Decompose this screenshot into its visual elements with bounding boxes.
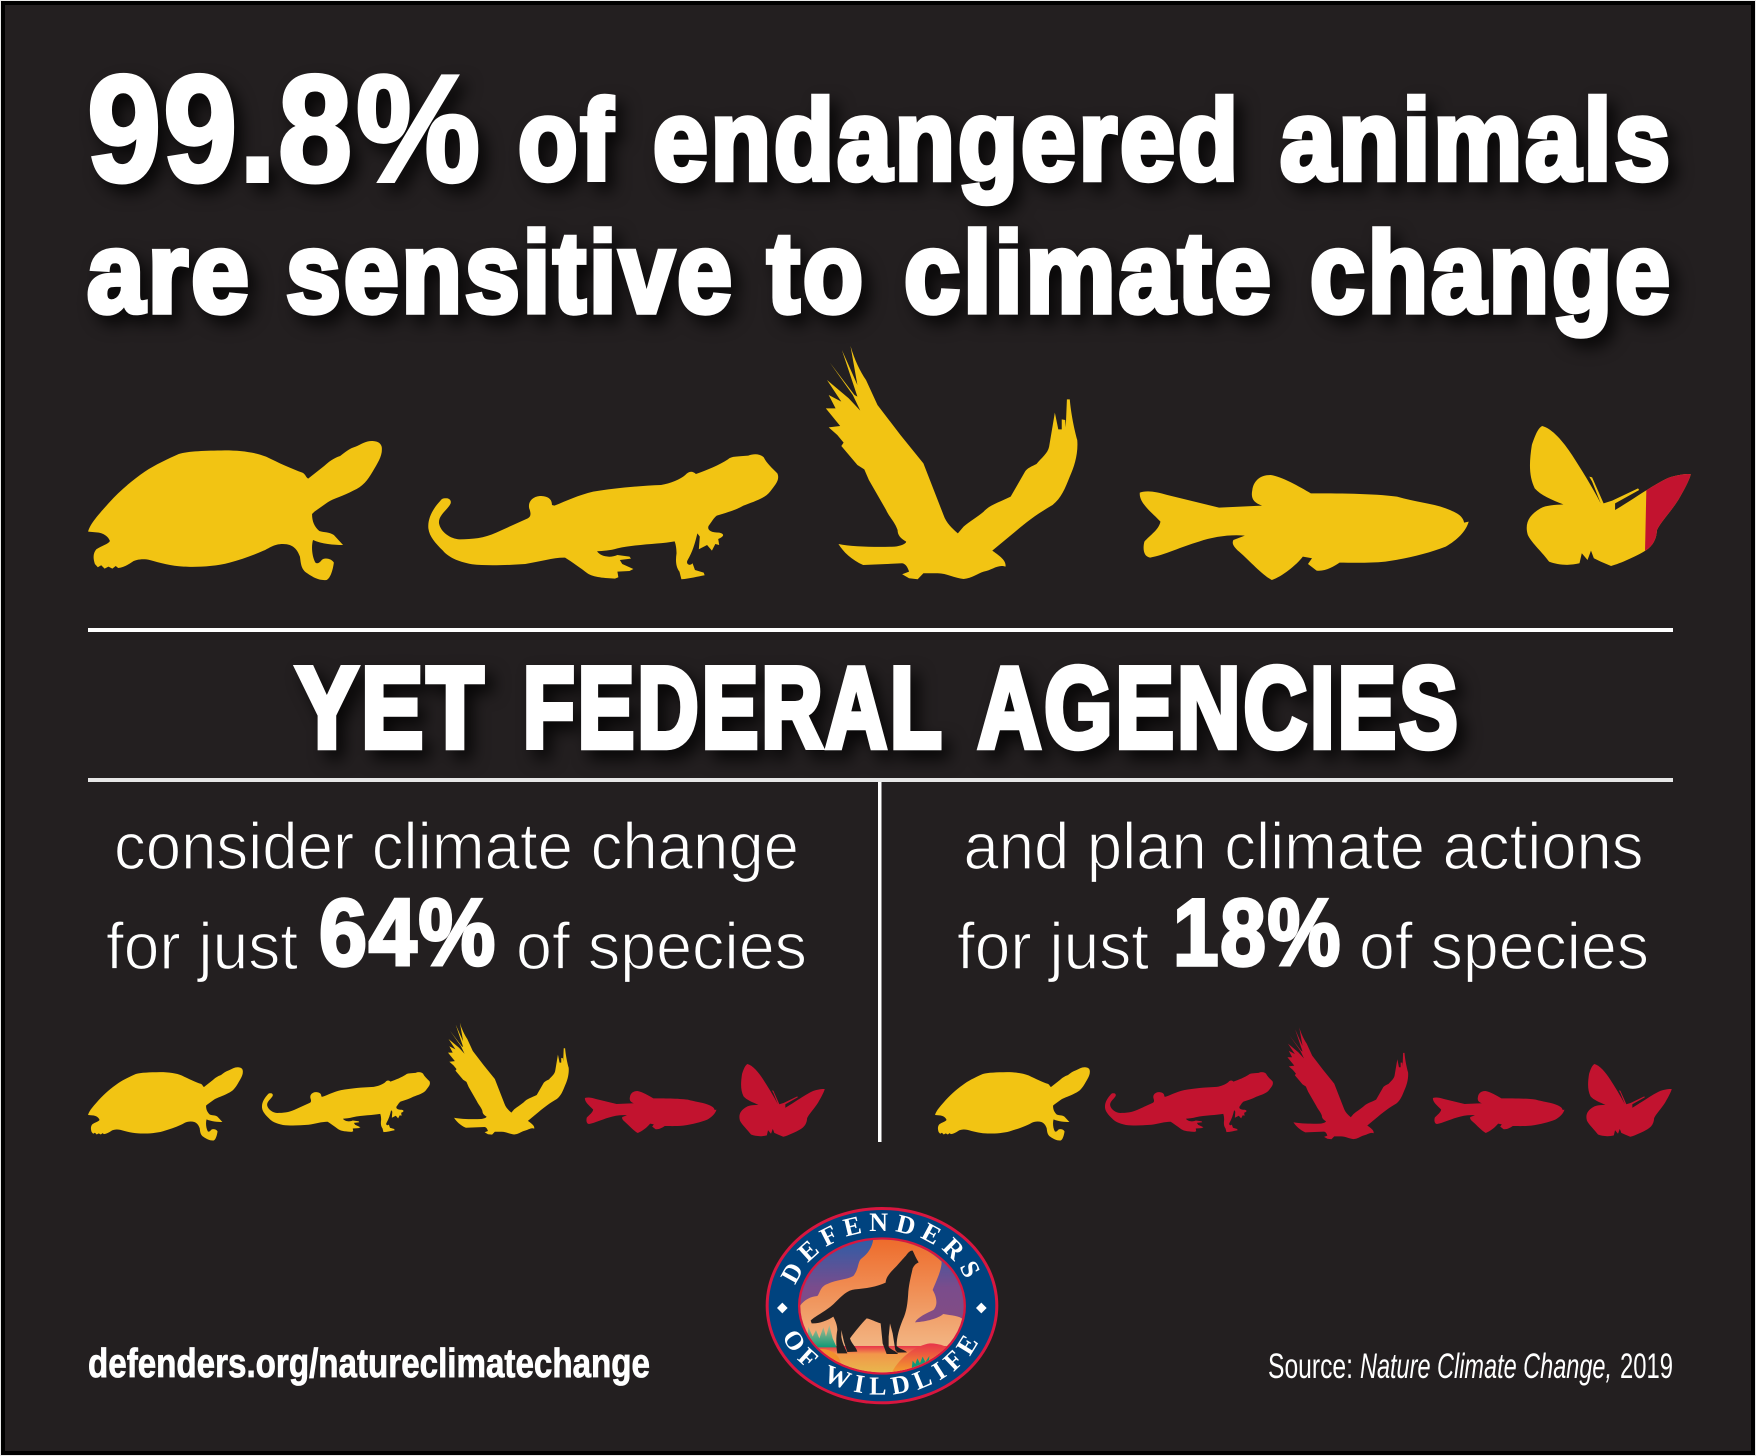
title line 1: animals (1280, 78, 1673, 204)
text: for just 18% of species: 18% (1173, 880, 1342, 986)
heading: yet federal agencies: FEDERAL (523, 645, 945, 772)
small turtle (935, 1067, 1090, 1141)
text: for just 18% of species (957, 880, 1649, 986)
title (87, 44, 1673, 337)
title line 2: climate (904, 210, 1274, 337)
title line 1: 99.8 (87, 44, 354, 214)
panel: consider climate change, 64% (88, 809, 825, 1141)
logo text: of Wildlife: OF WILDLIFE (784, 1331, 978, 1395)
icon: eagle (826, 346, 1077, 579)
title line 2: are (87, 210, 252, 337)
icon: butterfly, part red (1527, 426, 1691, 566)
title line 1: endangered (653, 78, 1241, 204)
logo: Defenders of Wildlife (766, 1207, 998, 1404)
small butterfly (739, 1064, 825, 1137)
icon row: one of five yellow (935, 1027, 1672, 1141)
small eagle (1287, 1027, 1408, 1139)
title line 1: % (356, 44, 482, 214)
text: for just 64% of species (106, 880, 807, 986)
source credit: Nature Climate Change, (1360, 1347, 1612, 1386)
logo wolf silhouette (811, 1251, 919, 1354)
text: and plan climate actions: and plan climate actions (964, 809, 1644, 883)
title line 2: change (1310, 210, 1673, 337)
icon row: three of five yellow (88, 1023, 825, 1141)
small fish (585, 1091, 716, 1133)
title line 2: to (767, 210, 866, 337)
large animal row: 99.8% sensitive (88, 346, 1691, 580)
small eagle (448, 1023, 569, 1135)
logo diamonds (777, 1303, 987, 1313)
icon: fish (1140, 475, 1469, 580)
title line 1: of (518, 78, 616, 204)
text: for just 18% of species: for just (957, 909, 1149, 983)
heading: yet federal agencies: YET (296, 645, 487, 772)
logo text: Defenders: DEFENDERS (780, 1214, 980, 1285)
footer url: defenders.org/natureclimatechange (88, 1340, 650, 1386)
small salamander (1105, 1072, 1273, 1132)
title line 2: sensitive (286, 210, 735, 337)
small turtle (88, 1067, 243, 1141)
source credit (1268, 1347, 1673, 1386)
small salamander (262, 1072, 430, 1132)
icon: salamander (428, 454, 778, 579)
source credit: Source: (1268, 1347, 1353, 1386)
panel: plan climate actions, 18% (935, 809, 1672, 1141)
divider rules (88, 628, 1673, 1142)
heading: yet federal agencies: AGENCIES (978, 645, 1461, 772)
text: for just 64% of species: 64% (319, 880, 497, 986)
small fish (1433, 1091, 1564, 1133)
heading: yet federal agencies (296, 645, 1461, 772)
text: for just 64% of species: for just (106, 909, 298, 983)
text: for just 64% of species: of species (516, 909, 807, 983)
logo scene (797, 1237, 968, 1377)
title line 2 (87, 210, 1673, 337)
text: consider climate change: consider climate change (114, 809, 799, 883)
title line 1 (87, 44, 1673, 214)
text: for just 18% of species: of species (1359, 909, 1649, 983)
icon: turtle (88, 441, 382, 580)
small butterfly (1586, 1064, 1672, 1137)
source credit: 2019 (1620, 1347, 1673, 1386)
